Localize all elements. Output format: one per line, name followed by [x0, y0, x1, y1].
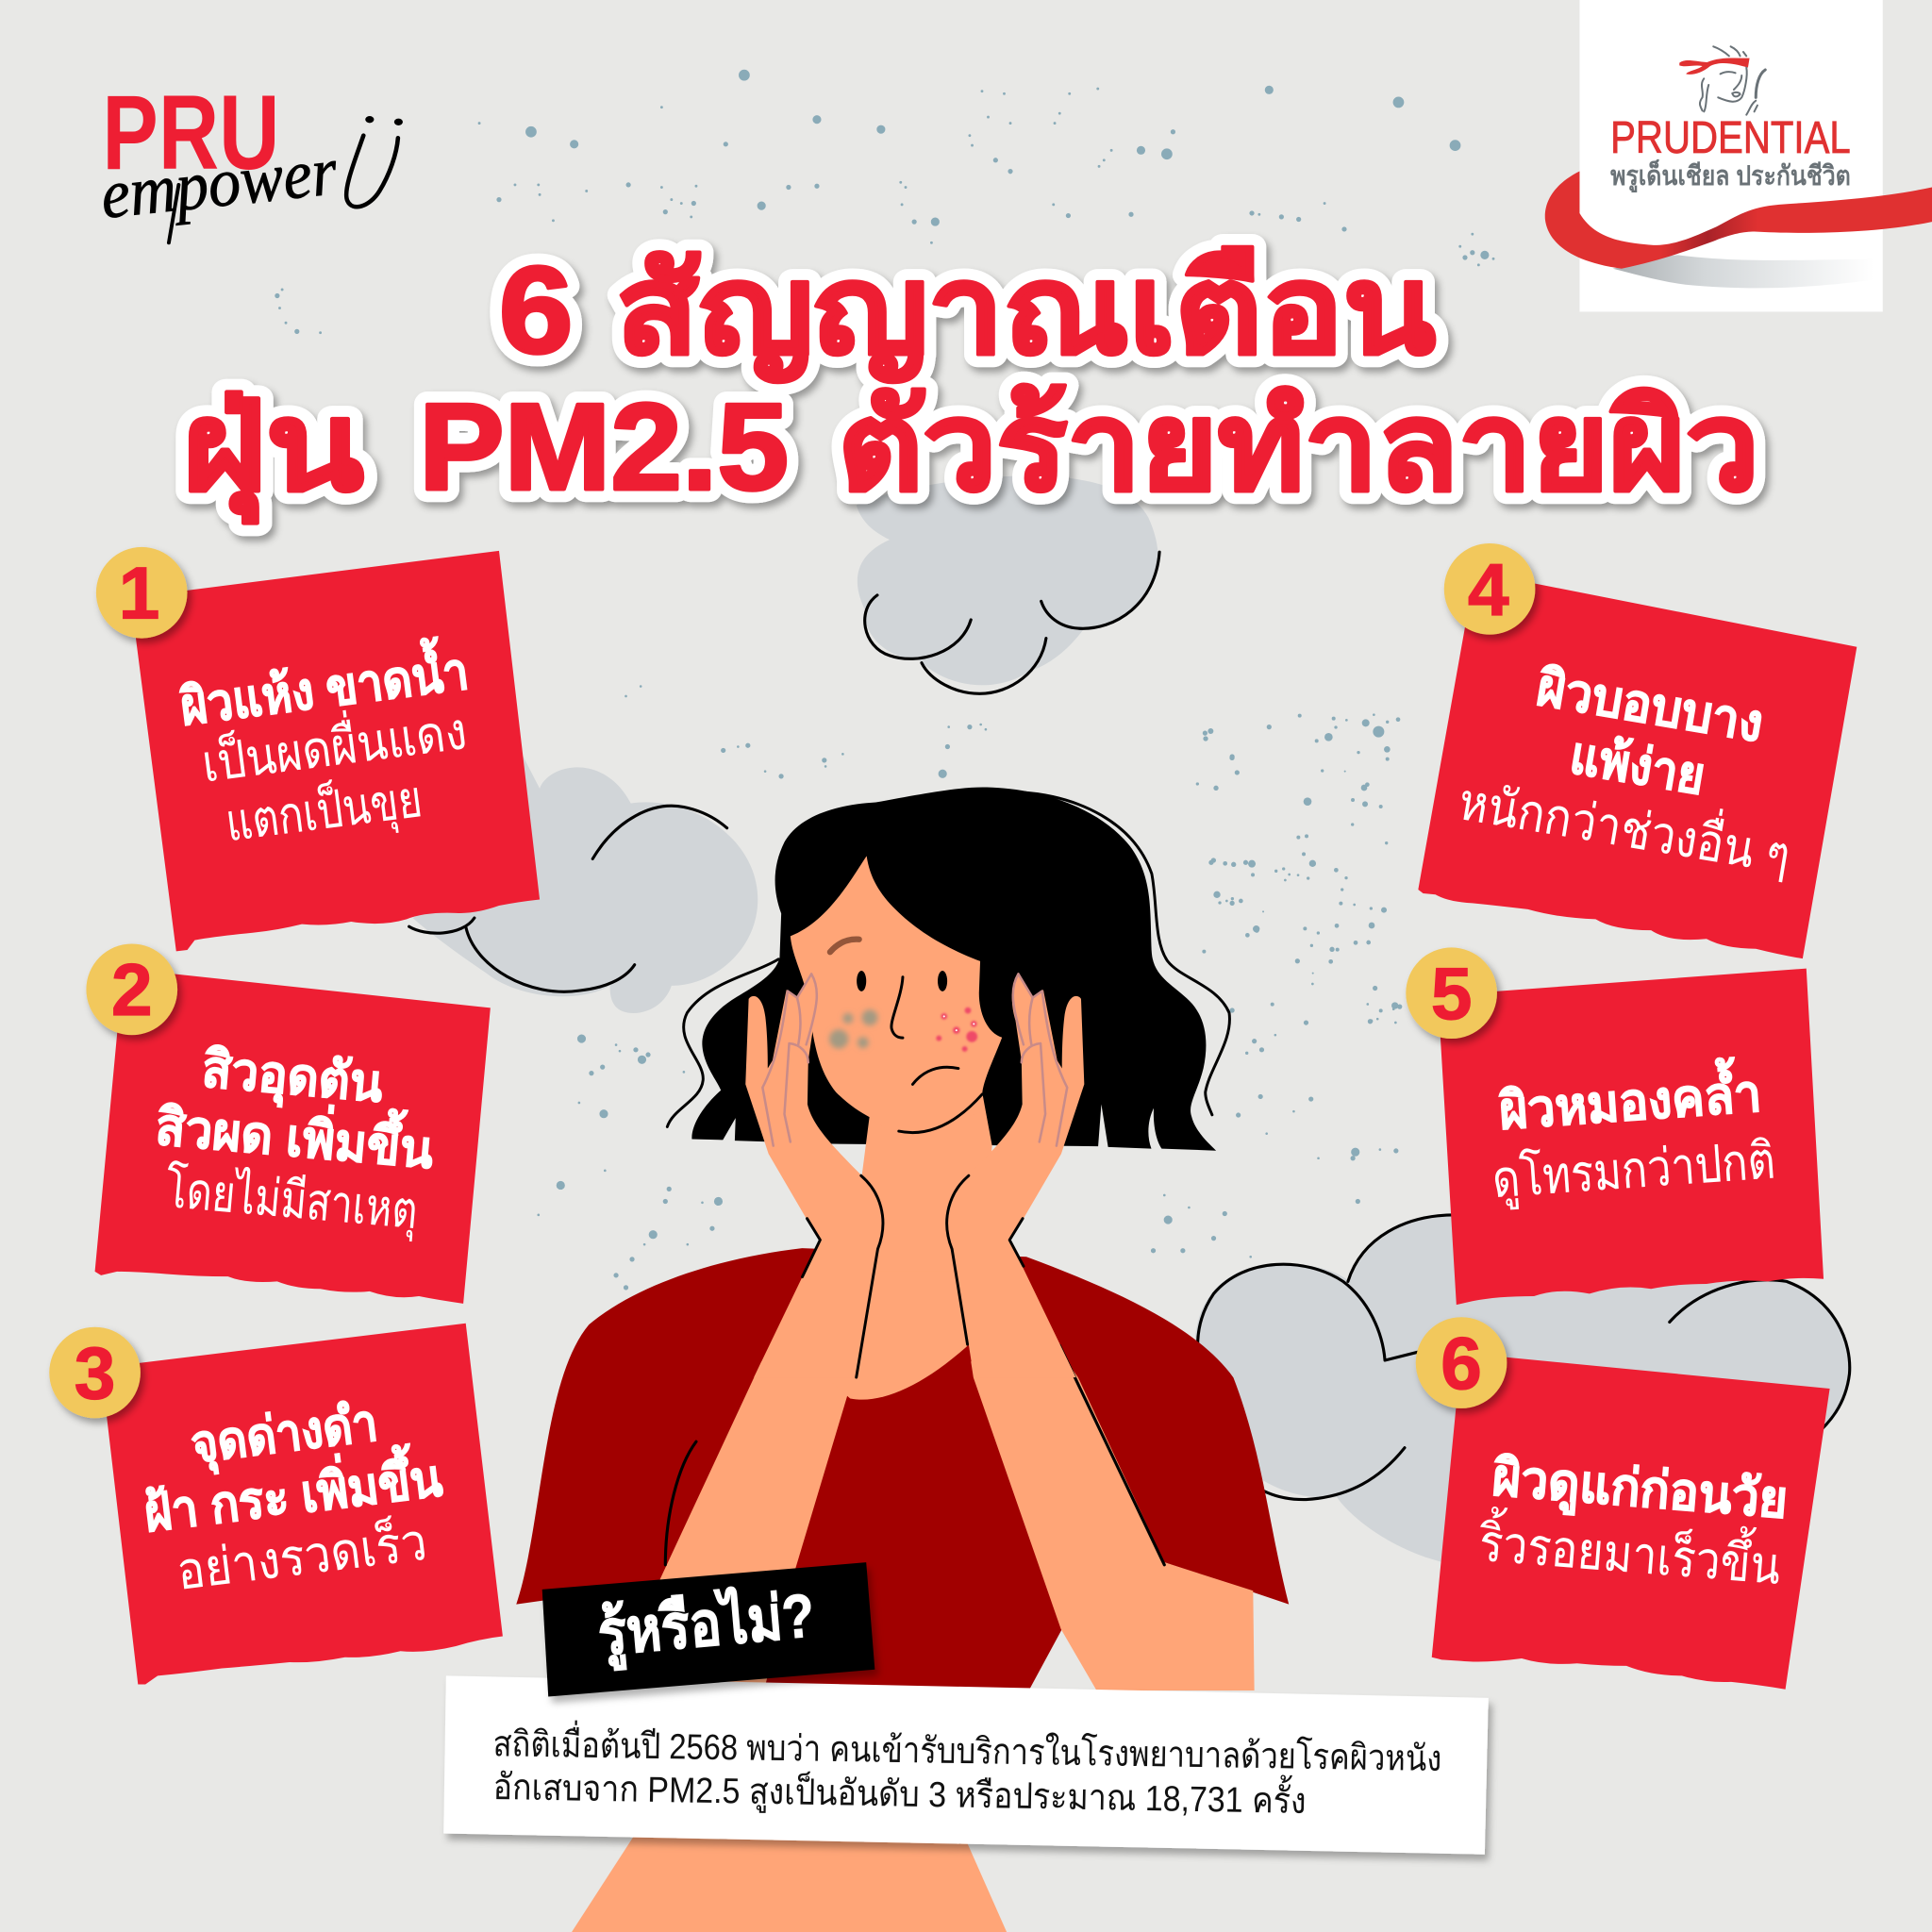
panel 1: ผิวแห้ง ขาดน้ำ [176, 633, 472, 736]
statistic box [443, 1675, 1489, 1855]
panel 6: ผิวดูแก่ก่อนวัย [1491, 1447, 1790, 1532]
logo: PRU empower U [97, 73, 403, 242]
logo: PRU empower U: PRU [102, 73, 279, 192]
dust cluster right [1196, 713, 1400, 1055]
badge 4 [1444, 543, 1535, 635]
acne [936, 1008, 977, 1052]
badge 1: 1 [119, 552, 159, 635]
left hand [745, 974, 883, 1377]
cloud: lower right [1195, 1214, 1850, 1639]
panel 4: แพ้ง่าย [1566, 725, 1709, 806]
woman illustration [516, 787, 1289, 1932]
title outline: ตัวร้ายทำลายผิว [838, 378, 1759, 516]
face [791, 856, 1002, 1136]
title fill: ฝุ่น [182, 378, 363, 525]
panel 5 [1438, 969, 1824, 1305]
badge 5 [1406, 947, 1497, 1039]
panel 6 [1432, 1353, 1830, 1690]
panel 1: แตกเป็นขุย [223, 768, 425, 855]
panel 5: ดูโทรมกว่าปกติ [1491, 1130, 1777, 1210]
panel 1 [130, 551, 540, 951]
title outline: สัญญาณเตือน [616, 242, 1436, 384]
title outline: ฝุ่น [182, 378, 363, 525]
did you know label [542, 1562, 874, 1697]
title fill [182, 242, 1759, 525]
logo: Prudential panel: พรูเด็นเชียล ประกันชีวิต [1610, 158, 1851, 192]
panel 3 [101, 1324, 503, 1684]
panel 1: เป็นผดผื่นแดง [198, 694, 470, 793]
title fill: PM2.5 [419, 378, 789, 516]
badge 2 [86, 943, 177, 1035]
logo: Prudential panel [1545, 0, 1932, 311]
title outline [182, 242, 1759, 525]
badge 6: 6 [1441, 1322, 1482, 1405]
logo: PRU empower U: empower [97, 132, 341, 233]
dust splatter [277, 75, 1493, 1288]
arm lines [665, 1345, 1164, 1565]
panel 4: ผิวบอบบาง [1533, 658, 1768, 753]
head and hands [667, 787, 1229, 1377]
eyebrow [830, 940, 859, 952]
ribbon shadow [1613, 255, 1874, 288]
panel 3: อย่างรวดเร็ว [174, 1511, 430, 1601]
chest [801, 1251, 974, 1400]
lower body [572, 1824, 1007, 1932]
eyes [857, 971, 947, 991]
badge 5: 5 [1431, 952, 1472, 1035]
badge 4: 4 [1468, 548, 1509, 631]
panel 5: ผิวหมองคล้ำ [1497, 1055, 1763, 1141]
title outline: PM2.5 [419, 378, 789, 516]
title outline: 6 [499, 242, 573, 379]
title fill: ตัวร้ายทำลายผิว [838, 378, 1759, 516]
right hand [947, 974, 1084, 1377]
badge 6 [1416, 1317, 1507, 1408]
badge 1 [96, 547, 188, 639]
panel 4 [1418, 572, 1857, 958]
title [182, 242, 1759, 525]
head emblem [1679, 46, 1765, 115]
badge 3 [49, 1327, 141, 1418]
panel 2: โดยไม่มีสาเหตุ [163, 1159, 420, 1242]
panel 3: ฝ้า กระ เพิ่มขึ้น [140, 1440, 445, 1542]
neck [848, 1092, 992, 1271]
panel 2: สิวผด เพิ่มขึ้น [154, 1089, 437, 1179]
hair [691, 787, 1216, 1151]
panel 2 [95, 969, 491, 1304]
cloud: top centre [857, 475, 1159, 693]
did you know label: รู้หรือไม่? [595, 1578, 818, 1673]
badge 2: 2 [111, 948, 153, 1031]
title fill: สัญญาณเตือน [616, 242, 1436, 384]
nose, mouth, jaw [891, 977, 982, 1133]
right lower arm [971, 1361, 1255, 1690]
badge 3: 3 [75, 1331, 115, 1414]
dark spots [829, 1009, 877, 1049]
logo: Prudential panel: PRUDENTIAL [1610, 112, 1851, 163]
statistic box: สถิติเมื่อต้นปี 2568 พบว่า คนเข้ารับบริการในโรงพยาบาลด้วยโรคผิวหนัง [492, 1719, 1442, 1779]
left lower arm [616, 1361, 858, 1690]
panel 3: จุดด่างดำ [188, 1392, 381, 1477]
cloud: left [409, 745, 758, 1013]
panel 6: ริ้วรอยมาเร็วขึ้น [1476, 1506, 1783, 1595]
shirt [516, 1248, 1289, 1690]
statistic box: อักเสบจาก PM2.5 สูงเป็นอันดับ 3 หรือประมาณ 18,731 ครั้ง [492, 1760, 1307, 1823]
panel 2: สิวอุดตัน [200, 1039, 386, 1117]
ribbon [1545, 172, 1932, 269]
title fill: 6 [499, 242, 573, 379]
hair outlines [667, 792, 1229, 1126]
panel 4: หนักกว่าช่วงอื่น ๆ [1455, 765, 1796, 885]
